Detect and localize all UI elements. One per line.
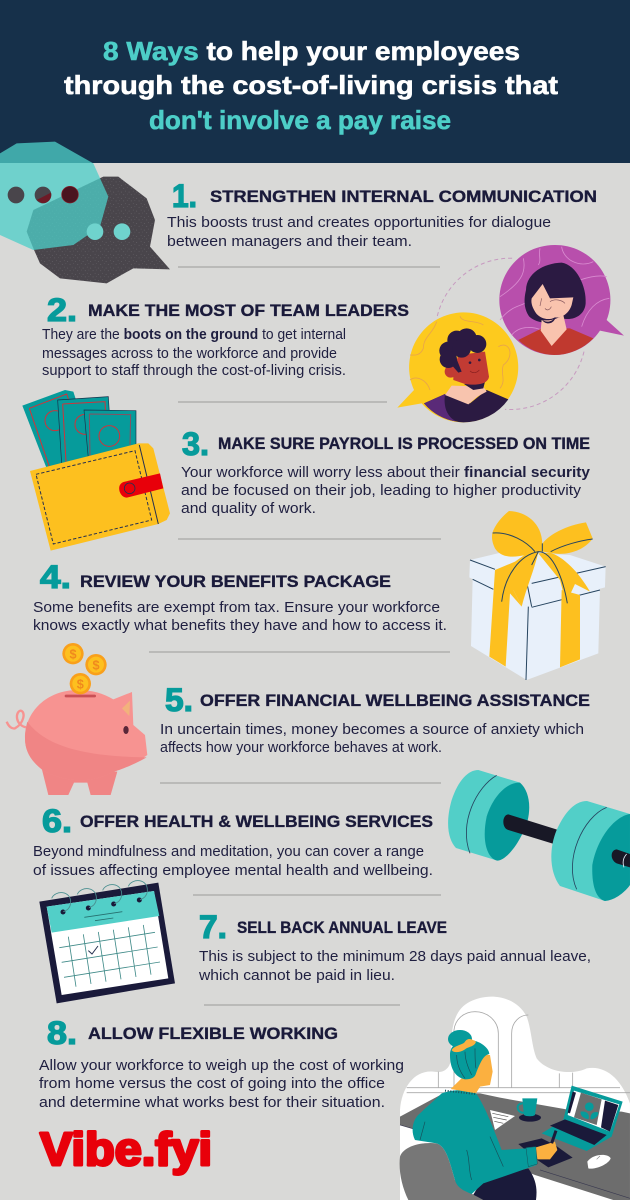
coins [62,643,107,694]
coins: $ [69,647,77,661]
panel: item 1 [167,178,597,250]
body 8: from home versus the cost of going into the office [39,1076,385,1092]
icon: speech bubbles [0,142,170,283]
body 4 [33,600,447,634]
heading 4: REVIEW YOUR BENEFITS PACKAGE [80,573,391,591]
title [64,36,558,135]
heading 3: MAKE SURE PAYROLL IS PROCESSED ON TIME [218,435,590,453]
laptop [542,1086,623,1151]
body 1 [167,215,551,250]
icon: calendar [39,881,175,1003]
title: through the cost-of-living crisis that [64,70,558,100]
body 3: and be focused on their job, leading to higher productivity [181,483,582,499]
body 7: This is subject to the minimum 28 days paid annual leave, [199,949,591,965]
number 2: 2. [47,292,77,328]
number 8: 8. [47,1015,77,1051]
logo: Vibe.fyi [40,1123,212,1175]
body 2: support to staff through the cost-of-living crisis. [42,363,346,379]
body 6 [33,844,433,879]
heading 7: SELL BACK ANNUAL LEAVE [237,919,447,937]
body 5: In uncertain times, money becomes a source of anxiety which [160,722,584,738]
coins: $ [77,677,84,691]
body 2 [42,327,346,379]
heading 1: STRENGTHEN INTERNAL COMMUNICATION [210,188,597,206]
icon: person working at a laptop [400,997,630,1200]
body 3: and quality of work. [181,501,316,517]
body 3 [181,465,590,517]
body 8: Allow your workforce to weigh up the cost of working [39,1058,404,1074]
man bubble [397,312,518,422]
body 2: They are the boots on the ground to get internal [42,327,346,343]
body 3: Your workforce will worry less about their financial security [181,465,590,481]
header band [0,0,630,163]
body 1: This boosts trust and creates opportunities for dialogue [167,215,551,231]
icon: wallet with banknotes [22,390,170,551]
icon: two people talking [397,245,624,422]
number 3: 3. [182,426,209,462]
number 5: 5. [165,682,193,718]
panel: item 5 [160,682,590,756]
icon: gift box [469,511,606,680]
panel: item 4 [33,559,447,634]
title: 8 Ways to help your employees [103,36,520,66]
body 4: Some benefits are exempt from tax. Ensure your workforce [33,600,440,616]
number 7: 7. [199,909,227,945]
heading 2: MAKE THE MOST OF TEAM LEADERS [88,302,409,320]
body 7 [198,949,591,984]
number 4: 4. [40,559,71,595]
person [400,1030,557,1200]
panel: item 7 [198,909,591,984]
body 5: affects how your workforce behaves at work. [160,740,442,756]
heading 6: OFFER HEALTH & WELLBEING SERVICES [80,813,433,831]
heading 8: ALLOW FLEXIBLE WORKING [88,1025,338,1043]
panel: item 2 [42,292,409,379]
body 2: messages across to the workforce and provide [42,346,337,362]
number 1: 1. [172,178,197,214]
body 6: Beyond mindfulness and meditation, you can cover a range [33,844,424,860]
body 5 [160,722,584,756]
body 4: knows exactly what benefits they have and how to access it. [33,618,447,634]
icon: piggy bank with coins [7,643,147,795]
title: don't involve a pay raise [149,105,451,135]
panel: item 3 [181,426,590,517]
body 8 [39,1058,404,1111]
body 1: between managers and their team. [167,234,412,250]
panel: item 8 [39,1015,404,1111]
coins: $ [92,658,100,672]
body 6: of issues affecting employee mental health and wellbeing. [33,863,433,879]
number 6: 6. [42,803,72,839]
body 8: and determine what works best for their situation. [39,1095,385,1111]
panel: item 6 [33,803,433,879]
woman bubble [499,245,624,355]
heading 5: OFFER FINANCIAL WELLBEING ASSISTANCE [200,692,590,710]
body 7: which cannot be paid in lieu. [198,968,395,984]
icon: dumbbell [448,770,630,901]
